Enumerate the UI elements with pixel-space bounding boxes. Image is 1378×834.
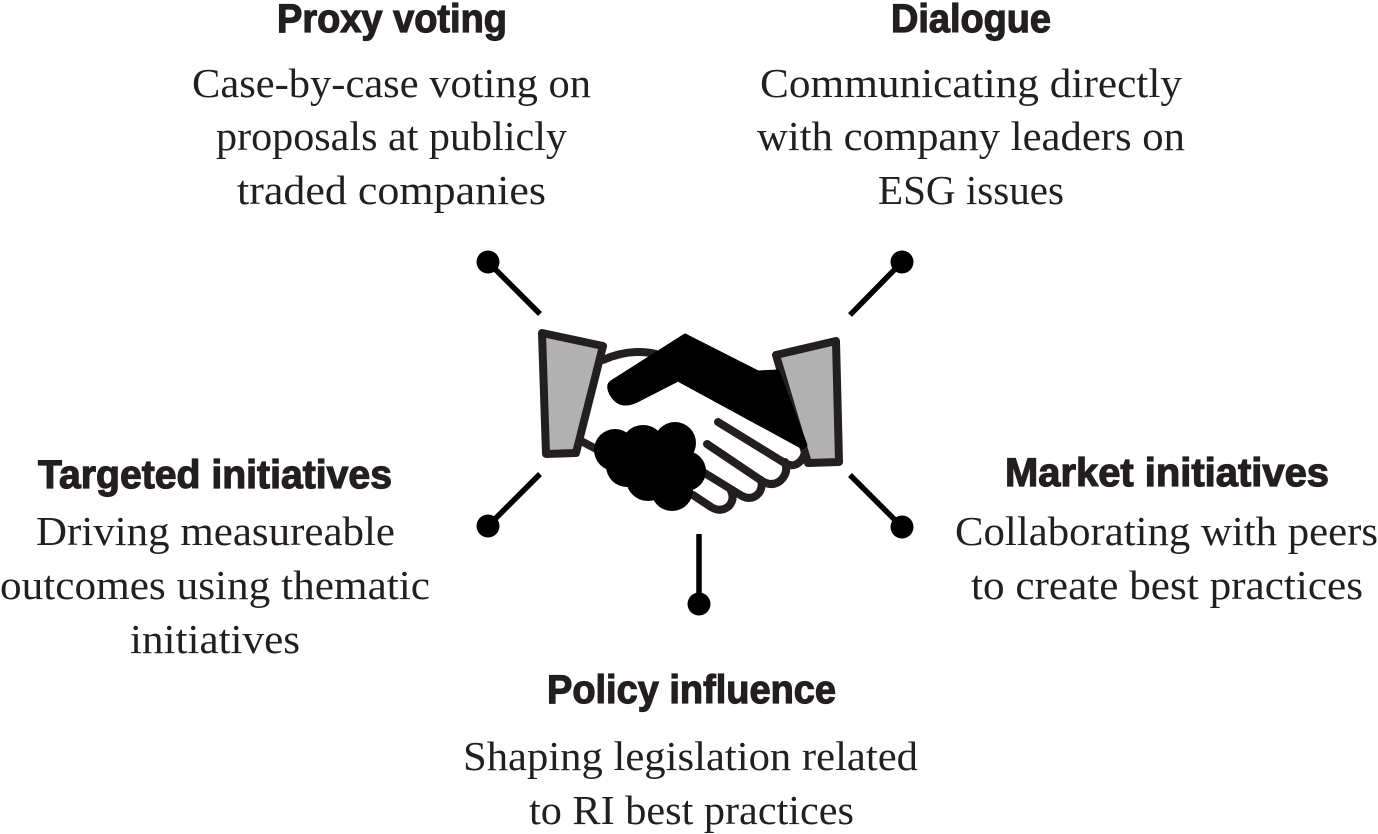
block: targeted initiatives [0, 453, 430, 662]
right cuff [776, 341, 839, 463]
block: proxy voting [192, 0, 591, 213]
connector: market initiatives [850, 475, 914, 538]
block: market initiatives [955, 451, 1378, 608]
fingers of white hand [583, 352, 806, 510]
text: targeted initiatives description [0, 508, 430, 662]
text: dialogue description: with company leaders on [757, 113, 1185, 159]
black clasped fingers [594, 422, 706, 511]
connector: proxy voting [476, 250, 540, 314]
text: dialogue description [757, 60, 1185, 213]
text: targeted initiatives description: initiatives [130, 616, 300, 662]
text: market initiatives description: to create best practices [971, 562, 1363, 608]
icon: handshake [542, 333, 839, 511]
connector: policy influence [688, 534, 710, 616]
text: proxy voting description [192, 60, 591, 213]
text: dialogue description: Communicating directly [760, 60, 1183, 106]
black hand [609, 335, 806, 448]
block: dialogue [757, 0, 1185, 213]
block: policy influence [463, 668, 918, 833]
text: proxy voting description: Case-by-case voting on [192, 60, 591, 106]
text: proxy voting description: proposals at publicly [216, 113, 568, 159]
text: market initiatives description [955, 508, 1378, 608]
connector: targeted initiatives [476, 474, 540, 538]
heading: market initiatives: Market initiatives [1005, 451, 1329, 495]
heading: policy influence: Policy influence [547, 668, 836, 712]
text: targeted initiatives description: outcomes using thematic [0, 562, 430, 608]
connector: dialogue [850, 250, 914, 315]
text: policy influence description [463, 733, 918, 833]
text: policy influence description: to RI best practices [529, 787, 854, 833]
text: proxy voting description: traded companies [237, 167, 546, 213]
heading: targeted initiatives: Targeted initiatives [38, 453, 392, 497]
text: dialogue description: ESG issues [878, 167, 1064, 213]
text: market initiatives description: Collaborating with peers [955, 508, 1378, 554]
text: policy influence description: Shaping legislation related [463, 733, 918, 779]
left cuff [542, 333, 603, 454]
text: targeted initiatives description: Driving measureable [36, 508, 395, 554]
